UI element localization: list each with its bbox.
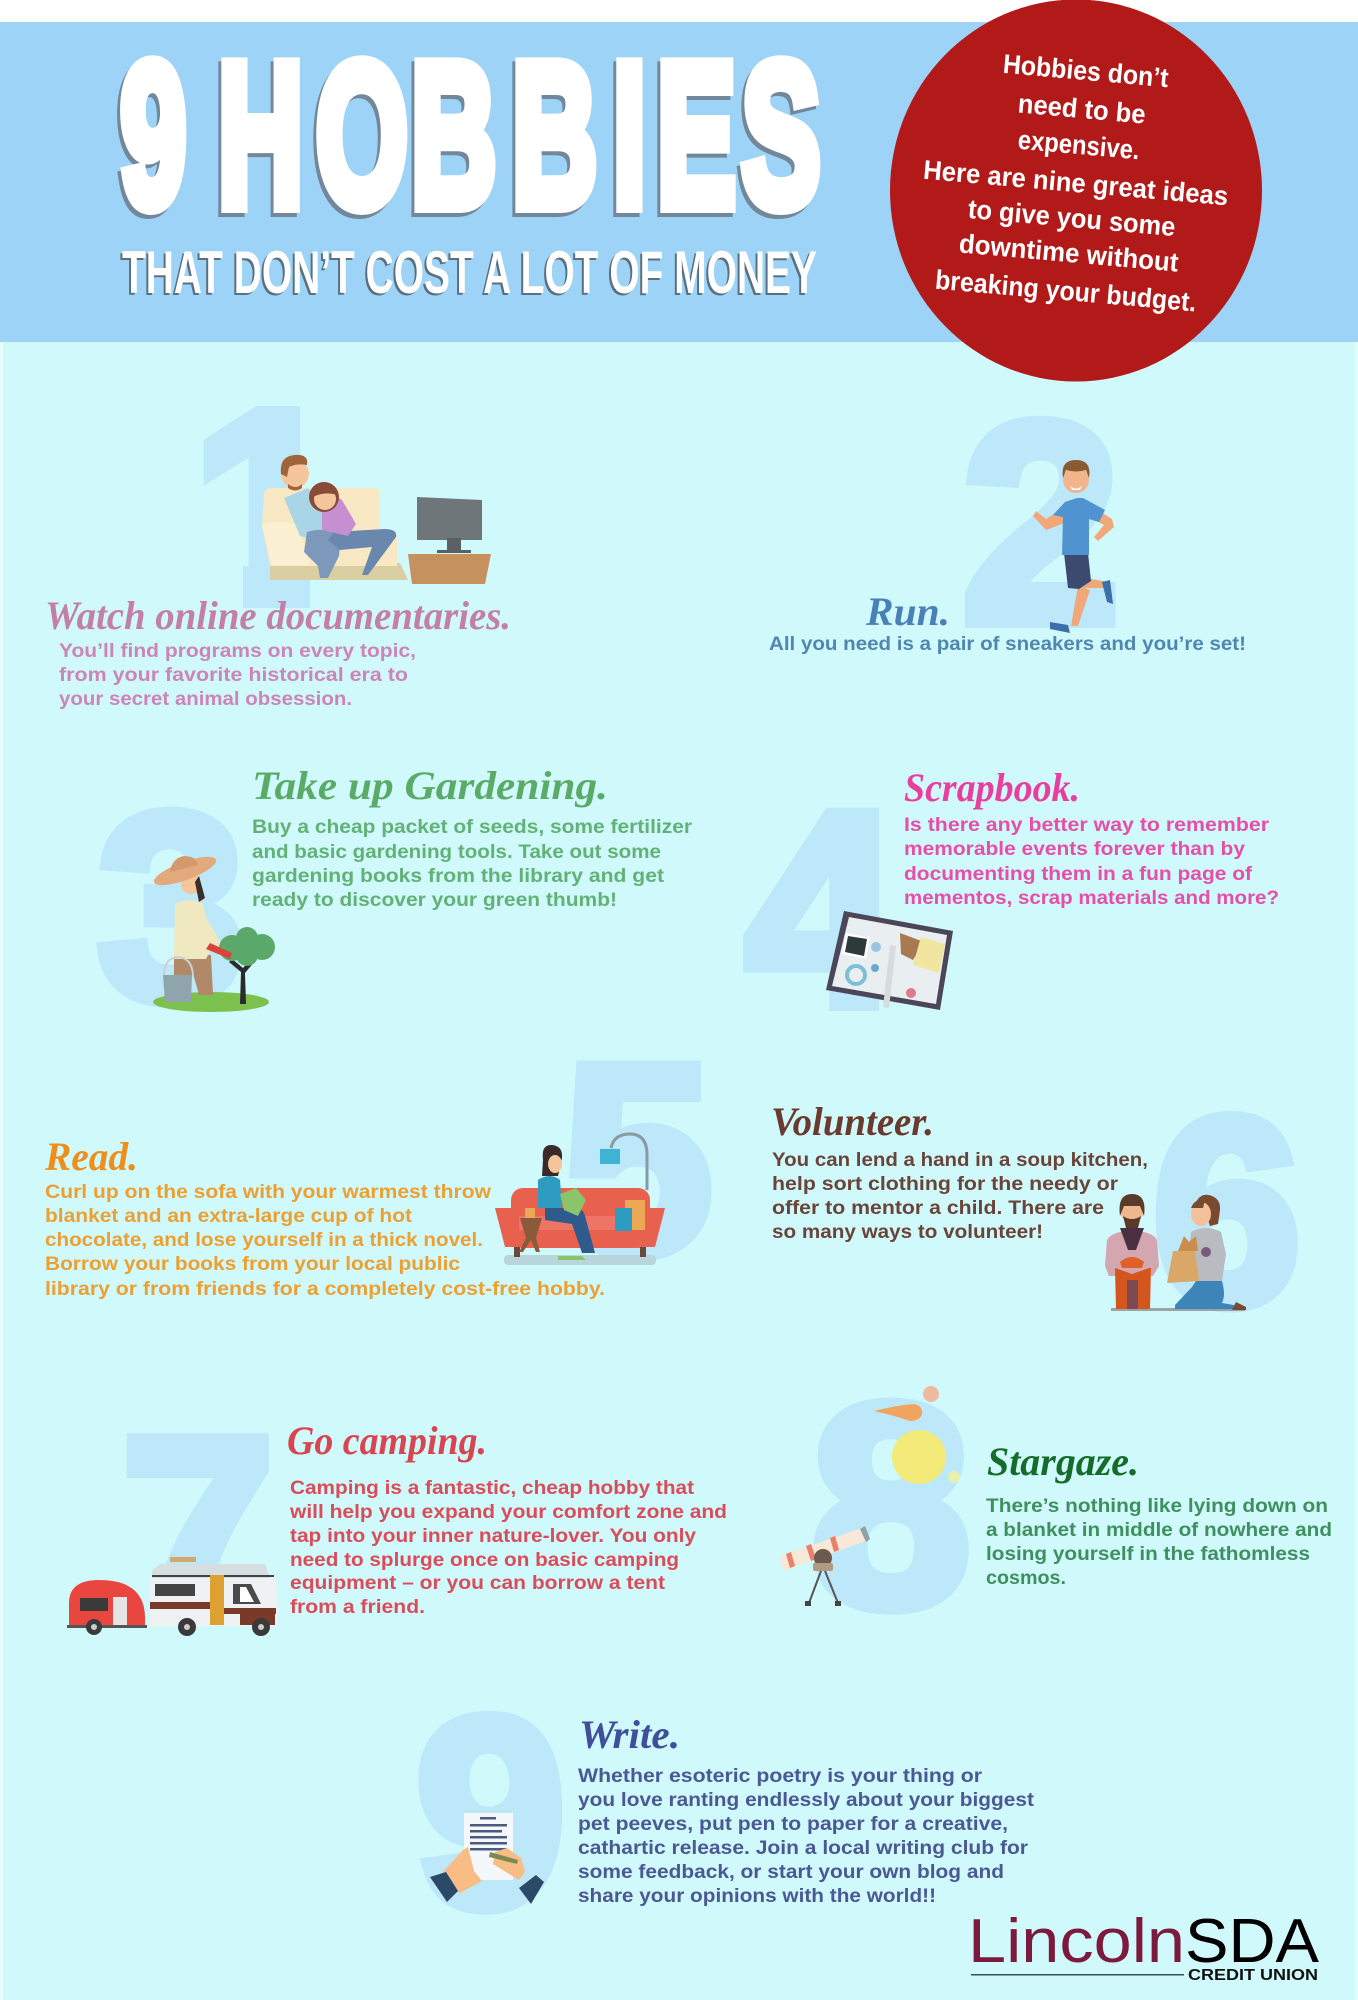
body text — [772, 1149, 1148, 1243]
callout text: downtime without — [958, 229, 1180, 278]
callout: red circle — [890, 0, 1262, 382]
body text: offer to mentor a child. There are — [772, 1197, 1104, 1219]
body text: Borrow your books from your local public — [45, 1253, 460, 1275]
panel: 6 volunteer — [771, 1064, 1300, 1360]
body text: Is there any better way to remember — [904, 814, 1269, 836]
body text: help sort clothing for the needy or — [772, 1173, 1118, 1195]
callout text: expensive. — [1017, 125, 1141, 165]
number 2: 2 — [962, 365, 1120, 682]
heading: Take up Gardening. — [252, 763, 608, 808]
heading: Stargaze. — [987, 1439, 1139, 1484]
number 5: 5 — [563, 1009, 712, 1309]
heading: Watch online documentaries. — [45, 593, 511, 638]
callout text — [922, 49, 1230, 317]
body text: cathartic release. Join a local writing club for — [578, 1837, 1028, 1859]
icon: woman reading on sofa — [495, 1134, 665, 1265]
number 8: 8 — [811, 1345, 971, 1666]
body text: memorable events forever than by — [904, 838, 1245, 860]
icon: camper and trailer — [67, 1557, 278, 1636]
body text: gardening books from the library and get — [252, 865, 665, 887]
callout text: need to be — [1017, 89, 1147, 130]
body text: Camping is a fantastic, cheap hobby that — [290, 1477, 695, 1499]
icon: gardener — [151, 851, 275, 1012]
heading: Volunteer. — [771, 1099, 934, 1144]
body text: equipment – or you can borrow a tent — [290, 1572, 666, 1594]
body text — [252, 816, 692, 911]
panel: 9 write — [416, 1662, 1035, 1962]
body text — [289, 1477, 727, 1618]
body text — [986, 1495, 1332, 1589]
body text: a blanket in middle of nowhere and — [986, 1519, 1332, 1541]
title: 9HOBBIES — [118, 27, 817, 253]
callout text: Hobbies don’t — [1002, 49, 1170, 93]
body text — [45, 1181, 605, 1300]
heading: Write. — [579, 1712, 680, 1757]
body text: cosmos. — [986, 1567, 1066, 1589]
panel: 7 camping — [67, 1426, 726, 1636]
icon: volunteer giving bag — [1105, 1194, 1246, 1311]
body text: You can lend a hand in a soup kitchen, — [772, 1149, 1148, 1171]
body text: You’ll find programs on every topic, — [59, 640, 416, 662]
callout text: breaking your budget. — [934, 265, 1198, 317]
logo: Lincoln SDA Credit Union: Lincoln — [968, 1907, 1185, 1976]
icon: hands writing on paper — [430, 1813, 544, 1904]
icon: couple on sofa watching tv — [262, 455, 491, 584]
subtitle: THAT DON’T COST A LOT OF MONEY — [120, 241, 815, 308]
logo: Lincoln SDA Credit Union: SDA — [1185, 1907, 1320, 1976]
body text: share your opinions with the world!! — [578, 1885, 936, 1907]
body text: from your favorite historical era to — [59, 664, 408, 686]
title: 9HOBBIES — [121, 23, 820, 249]
heading: Read. — [44, 1134, 138, 1179]
heading: Run. — [865, 589, 950, 634]
number 9: 9 — [416, 1662, 565, 1962]
body text: ready to discover your green thumb! — [252, 889, 617, 911]
body text: tap into your inner nature-lover. You only — [290, 1525, 696, 1547]
number 3: 3 — [98, 759, 245, 1054]
number 1: 1 — [192, 354, 344, 659]
number 4: 4 — [746, 756, 901, 1063]
subtitle: THAT DON’T COST A LOT OF MONEY — [122, 239, 817, 306]
body text: Whether esoteric poetry is your thing or — [578, 1765, 982, 1787]
body text: some feedback, or start your own blog and — [578, 1861, 1004, 1883]
body text: losing yourself in the fathomless — [986, 1543, 1310, 1565]
body text: so many ways to volunteer! — [772, 1221, 1043, 1243]
callout text: to give you some — [967, 194, 1177, 242]
body text: chocolate, and lose yourself in a thick novel. — [45, 1229, 483, 1251]
heading: Scrapbook. — [904, 765, 1080, 810]
body text: blanket and an extra-large cup of hot — [45, 1205, 413, 1227]
body text: your secret animal obsession. — [59, 688, 352, 710]
panel: 1 watch online documentaries — [48, 406, 508, 709]
callout text: Here are nine great ideas — [922, 155, 1230, 211]
body text — [904, 814, 1279, 909]
panel: 3 gardening — [98, 759, 692, 1054]
header band — [0, 0, 1358, 382]
body text: Curl up on the sofa with your warmest throw — [45, 1181, 492, 1203]
body text — [59, 640, 416, 710]
body text: Buy a cheap packet of seeds, some fertilizer — [252, 816, 692, 838]
logo: Lincoln SDA Credit Union — [968, 1907, 1320, 1984]
icon: runner — [1033, 460, 1114, 633]
body text: will help you expand your comfort zone and — [289, 1501, 727, 1523]
body text: There’s nothing like lying down on — [986, 1495, 1328, 1517]
body text: from a friend. — [290, 1596, 425, 1618]
panel: 5 read — [44, 1009, 712, 1309]
icon: telescope and planets — [780, 1386, 960, 1606]
subtitle — [120, 239, 817, 308]
panel: 8 stargaze — [780, 1345, 1332, 1666]
body text: mementos, scrap materials and more? — [904, 887, 1279, 909]
number 7: 7 — [122, 1381, 274, 1686]
panel: 4 scrapbook — [746, 756, 1279, 1063]
panel: 2 run — [769, 365, 1246, 682]
body text: pet peeves, put pen to paper for a creative, — [578, 1813, 1008, 1835]
body text: and basic gardening tools. Take out some — [252, 841, 661, 863]
logo: Lincoln SDA Credit Union: CREDIT UNION — [1188, 1967, 1318, 1984]
number 6: 6 — [1153, 1064, 1300, 1360]
body text: documenting them in a fun page of — [904, 863, 1253, 885]
body text: All you need is a pair of sneakers and you’re set! — [769, 633, 1246, 655]
body text: need to splurge once on basic camping — [290, 1549, 679, 1571]
body text: library or from friends for a completely cost-free hobby. — [45, 1278, 605, 1300]
body text: you love ranting endlessly about your biggest — [578, 1789, 1035, 1811]
body text — [578, 1765, 1035, 1907]
heading: Go camping. — [287, 1418, 487, 1463]
icon: open scrapbook — [826, 911, 953, 1010]
